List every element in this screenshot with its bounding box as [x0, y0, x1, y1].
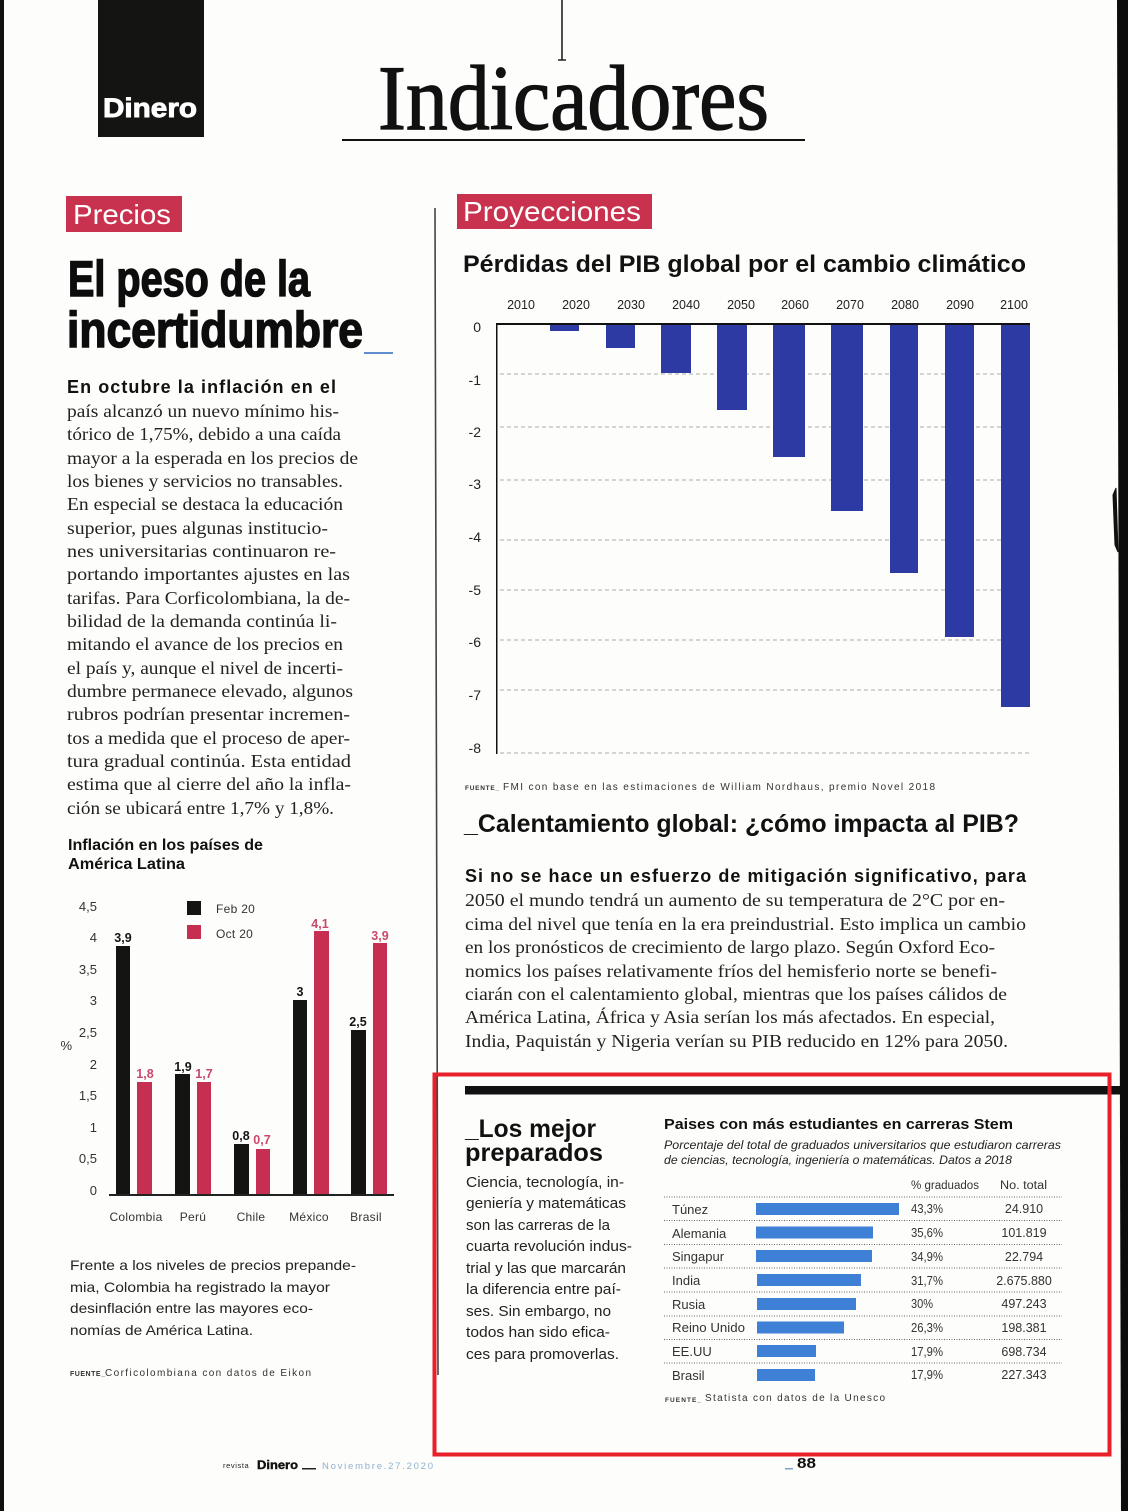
table: graduados por país: India	[672, 1273, 701, 1288]
text: ciencia y tecnología	[466, 1174, 632, 1363]
country labels: Chile	[237, 1210, 265, 1224]
tag: Precios	[66, 196, 182, 232]
article text: inflación: estima que al cierre del año la infla-	[67, 774, 351, 794]
footer: 88	[797, 1455, 816, 1472]
years: 2030	[617, 298, 645, 312]
bar chart: inflación: 3,9	[371, 929, 389, 943]
bars	[116, 946, 366, 1195]
table heading: carreras Stem	[664, 1116, 1061, 1167]
years: 2070	[836, 298, 864, 312]
bar chart: inflación: 0,7	[253, 1133, 271, 1147]
source: FMI: FUENTE_	[465, 785, 499, 792]
bar chart: inflación: 4,1	[311, 917, 329, 931]
text: ciencia y tecnología: todos han sido efica-	[466, 1324, 610, 1341]
table: graduados por país: 101.819	[1001, 1226, 1047, 1240]
headline: El peso de la incertidumbre: incertidumbre	[67, 302, 363, 358]
heading: inflación en América Latina: Inflación en los países de	[68, 837, 263, 854]
table: graduados por país: 198.381	[1001, 1321, 1047, 1335]
table: graduados por país: Túnez	[672, 1202, 708, 1217]
article text: calentamiento	[465, 866, 1027, 1051]
tag: Precios: Precios	[73, 199, 171, 230]
table: graduados por país: 227.343	[1001, 1368, 1047, 1382]
article text: inflación: dumbre permanece elevado, algunos	[67, 681, 353, 701]
legend: Feb 20	[216, 902, 255, 916]
table: graduados por país: No. total	[1000, 1180, 1047, 1192]
heading: Calentamiento global: _Calentamiento global: ¿cómo impacta al PIB?	[463, 810, 1019, 838]
source: FMI: FMI con base en las estimaciones de William Nordhaus, premio Novel 2018	[503, 782, 935, 793]
y axis: -4	[469, 529, 481, 545]
logo: Dinero: Dinero	[103, 93, 197, 123]
heading: Los mejor preparados: _Los mejor	[464, 1115, 596, 1143]
note: desinflación	[70, 1257, 356, 1338]
heading: Los mejor preparados	[464, 1115, 603, 1167]
country labels	[109, 1210, 382, 1224]
note: desinflación: mia, Colombia ha registrado la mayor	[70, 1279, 330, 1295]
y axis labels: 1,5	[79, 1088, 97, 1103]
bar chart: inflación: 1,7	[195, 1067, 213, 1081]
text: ciencia y tecnología: Ciencia, tecnología, in-	[466, 1174, 624, 1191]
table: graduados por país: Rusia	[672, 1297, 706, 1312]
value labels	[114, 931, 367, 1143]
text: ciencia y tecnología: ses. Sin embargo, no	[466, 1303, 611, 1320]
y axis labels: 4,5	[79, 899, 97, 914]
footer: revista	[223, 1461, 250, 1470]
table: graduados por país: 17,9%	[911, 1368, 943, 1382]
table: graduados por país: Reino Unido	[672, 1320, 745, 1335]
note: desinflación: Frente a los niveles de precios prepande-	[70, 1257, 356, 1273]
y axis labels: 3	[90, 993, 97, 1008]
article text: calentamiento: 2050 el mundo tendrá un aumento de su temperatura de 2°C por en-	[465, 890, 1005, 910]
table: graduados por país: 26,3%	[911, 1321, 943, 1335]
article text: inflación: nes universitarias continuaron re-	[67, 541, 336, 561]
bar chart: inflación	[60, 899, 394, 1224]
table heading: carreras Stem: Porcentaje del total de graduados universitarios que estudiaron carreras	[664, 1138, 1061, 1152]
logo: Dinero	[98, 0, 204, 137]
table: graduados por país	[664, 1180, 1062, 1383]
text: ciencia y tecnología: cuarta revolución indus-	[466, 1238, 632, 1255]
y axis labels: 4	[90, 930, 97, 945]
table: graduados por país: EE.UU	[672, 1344, 712, 1359]
source: Statista: FUENTE_	[665, 1397, 701, 1404]
article text: calentamiento: América Latina, África y Asia serían los más afectados. En especial,	[465, 1007, 995, 1027]
value labels: 3	[297, 985, 304, 999]
table: graduados por país: Alemania	[672, 1226, 727, 1241]
article text: inflación: mitando el avance de los precios en	[67, 634, 343, 654]
country labels: Colombia	[109, 1210, 163, 1224]
article text: inflación: tarifas. Para Corficolombiana, la de-	[67, 588, 350, 608]
article text: inflación: portando importantes ajustes en las	[67, 564, 350, 584]
article text: calentamiento: nomics los países relativamente fríos del hemisferio norte se benefi-	[465, 961, 997, 981]
country labels: Perú	[180, 1210, 206, 1224]
article text: inflación: En octubre la inflación en el	[67, 377, 336, 397]
bar chart: inflación: 1,8	[136, 1067, 154, 1081]
y axis: -7	[469, 687, 481, 703]
bars	[550, 324, 1030, 707]
text: ciencia y tecnología: geniería y matemáticas	[466, 1195, 626, 1212]
table: graduados por país: % graduados	[911, 1180, 979, 1192]
value labels: 3,9	[114, 931, 132, 945]
article text: inflación: ción se ubicará entre 1,7% y 1,8%.	[67, 798, 334, 818]
table: graduados por país: 698.734	[1001, 1345, 1047, 1359]
article text: calentamiento: cima del nivel que tenía en la era preindustrial. Esto implica un cambio	[465, 914, 1026, 934]
footer	[223, 1455, 816, 1472]
table: graduados por país: 35,6%	[911, 1226, 943, 1240]
highlight frame	[434, 1074, 1110, 1454]
source: Statista: Statista con datos de la Unesco	[705, 1393, 885, 1404]
legend	[187, 901, 255, 941]
article text: calentamiento: India, Paquistán y Nigeria verían su PIB reducido en 12% para 2050.	[465, 1031, 1008, 1051]
y axis labels: %	[60, 1038, 72, 1053]
article text: calentamiento: en los pronósticos de crecimiento de largo plazo. Según Oxford Eco-	[465, 937, 995, 957]
years: 2060	[781, 298, 809, 312]
table: graduados por país: 31,7%	[911, 1274, 943, 1288]
heading: inflación en América Latina: América Latina	[68, 856, 185, 873]
y axis: 0	[473, 319, 481, 335]
headline: El peso de la incertidumbre: El peso de la	[68, 251, 311, 307]
years: 2090	[946, 298, 974, 312]
article text: inflación: rubros podrían presentar incremen-	[67, 704, 350, 724]
years: 2010	[507, 298, 535, 312]
years: 2020	[562, 298, 590, 312]
article text: inflación: bilidad de la demanda continúa li-	[67, 611, 337, 631]
table: graduados por país: 43,3%	[911, 1202, 943, 1216]
bar chart: pérdidas del PIB	[469, 298, 1030, 756]
y axis: -8	[469, 740, 481, 756]
table heading: carreras Stem: Paises con más estudiantes en carreras Stem	[664, 1116, 1013, 1133]
table: graduados por país: 30%	[911, 1297, 933, 1311]
value labels: 1,9	[174, 1060, 192, 1074]
y axis labels: 0	[90, 1183, 97, 1198]
article text: inflación: superior, pues algunas institucio-	[67, 518, 328, 538]
y axis labels: 0,5	[79, 1151, 97, 1166]
article text: inflación: tos a medida que el proceso de aper-	[67, 728, 350, 748]
years: 2040	[672, 298, 700, 312]
value labels: 0,8	[232, 1129, 250, 1143]
column divider	[435, 208, 438, 1375]
footer: Dinero	[257, 1458, 298, 1472]
source: Corficolombiana: FUENTE_	[70, 1371, 105, 1378]
article text: inflación: En especial se destaca la educación	[67, 494, 343, 514]
article text: calentamiento: ciarán con el calentamiento global, mientras que los países cálidos de	[465, 984, 1007, 1004]
y axis: -6	[469, 634, 481, 650]
table: graduados por país: Brasil	[672, 1368, 705, 1383]
country labels: Brasil	[350, 1210, 382, 1224]
article text: inflación: el país y, aunque el nivel de incerti-	[67, 658, 343, 678]
country labels: México	[289, 1210, 329, 1224]
text: ciencia y tecnología: ces para promoverlas.	[466, 1346, 619, 1363]
source: Corficolombiana: Corficolombiana con datos de Eikon	[105, 1368, 311, 1379]
note: desinflación: nomías de América Latina.	[70, 1322, 253, 1338]
text: ciencia y tecnología: trial y las que marcarán	[466, 1260, 626, 1277]
article text: inflación	[67, 377, 358, 818]
heading: inflación en América Latina	[68, 837, 263, 873]
y axis: -2	[469, 424, 481, 440]
table: graduados por país: Singapur	[672, 1249, 725, 1264]
y axis: -3	[469, 476, 481, 492]
y axis labels	[60, 899, 97, 1198]
headline: El peso de la incertidumbre	[67, 251, 393, 358]
years: 2050	[727, 298, 755, 312]
gridlines	[500, 374, 1030, 753]
table: graduados por país: 497.243	[1001, 1297, 1047, 1311]
article text: inflación: país alcanzó un nuevo mínimo his-	[67, 401, 339, 421]
article text: inflación: tura gradual continúa. Esta entidad	[67, 751, 351, 771]
y axis	[469, 319, 481, 756]
heading: Los mejor preparados: preparados	[465, 1139, 603, 1167]
y axis labels: 2	[90, 1057, 97, 1072]
y axis: -5	[469, 582, 481, 598]
table: graduados por país: 22.794	[1005, 1250, 1043, 1264]
note: desinflación: desinflación entre las mayores eco-	[70, 1300, 313, 1316]
article text: inflación: mayor a la esperada en los precios de	[67, 448, 358, 468]
article text: calentamiento: Si no se hace un esfuerzo de mitigación significativo, para	[465, 866, 1027, 886]
footer: Noviembre.27.2020	[322, 1461, 433, 1472]
table: graduados por país: 2.675.880	[996, 1274, 1052, 1288]
years: 2080	[891, 298, 919, 312]
article text: inflación: los bienes y servicios no transables.	[67, 471, 343, 491]
y axis labels: 1	[90, 1120, 97, 1135]
table heading: carreras Stem: de ciencias, tecnología, ingeniería o matemáticas. Datos a 2018	[664, 1153, 1012, 1167]
y axis labels: 3,5	[79, 962, 97, 977]
article text: inflación: tórico de 1,75%, debido a una caída	[67, 424, 341, 444]
years	[507, 298, 1028, 312]
table: graduados por país: 34,9%	[911, 1250, 943, 1264]
value labels: 2,5	[349, 1015, 367, 1029]
legend: Oct 20	[216, 927, 253, 941]
table: graduados por país: 17,9%	[911, 1345, 943, 1359]
heading: Pérdidas del PIB: Pérdidas del PIB global por el cambio climático	[463, 251, 1026, 278]
years: 2100	[1000, 298, 1028, 312]
text: ciencia y tecnología: la diferencia entre paí-	[466, 1281, 621, 1298]
title: Indicadores: Indicadores	[378, 47, 769, 149]
text: ciencia y tecnología: son las carreras de la	[466, 1217, 611, 1234]
y axis labels: 2,5	[79, 1025, 97, 1040]
tag: Proyecciones: Proyecciones	[463, 196, 641, 227]
panel: Los mejor preparados	[464, 1086, 1120, 1404]
y axis: -1	[469, 372, 481, 388]
table: graduados por país: 24.910	[1005, 1202, 1043, 1216]
